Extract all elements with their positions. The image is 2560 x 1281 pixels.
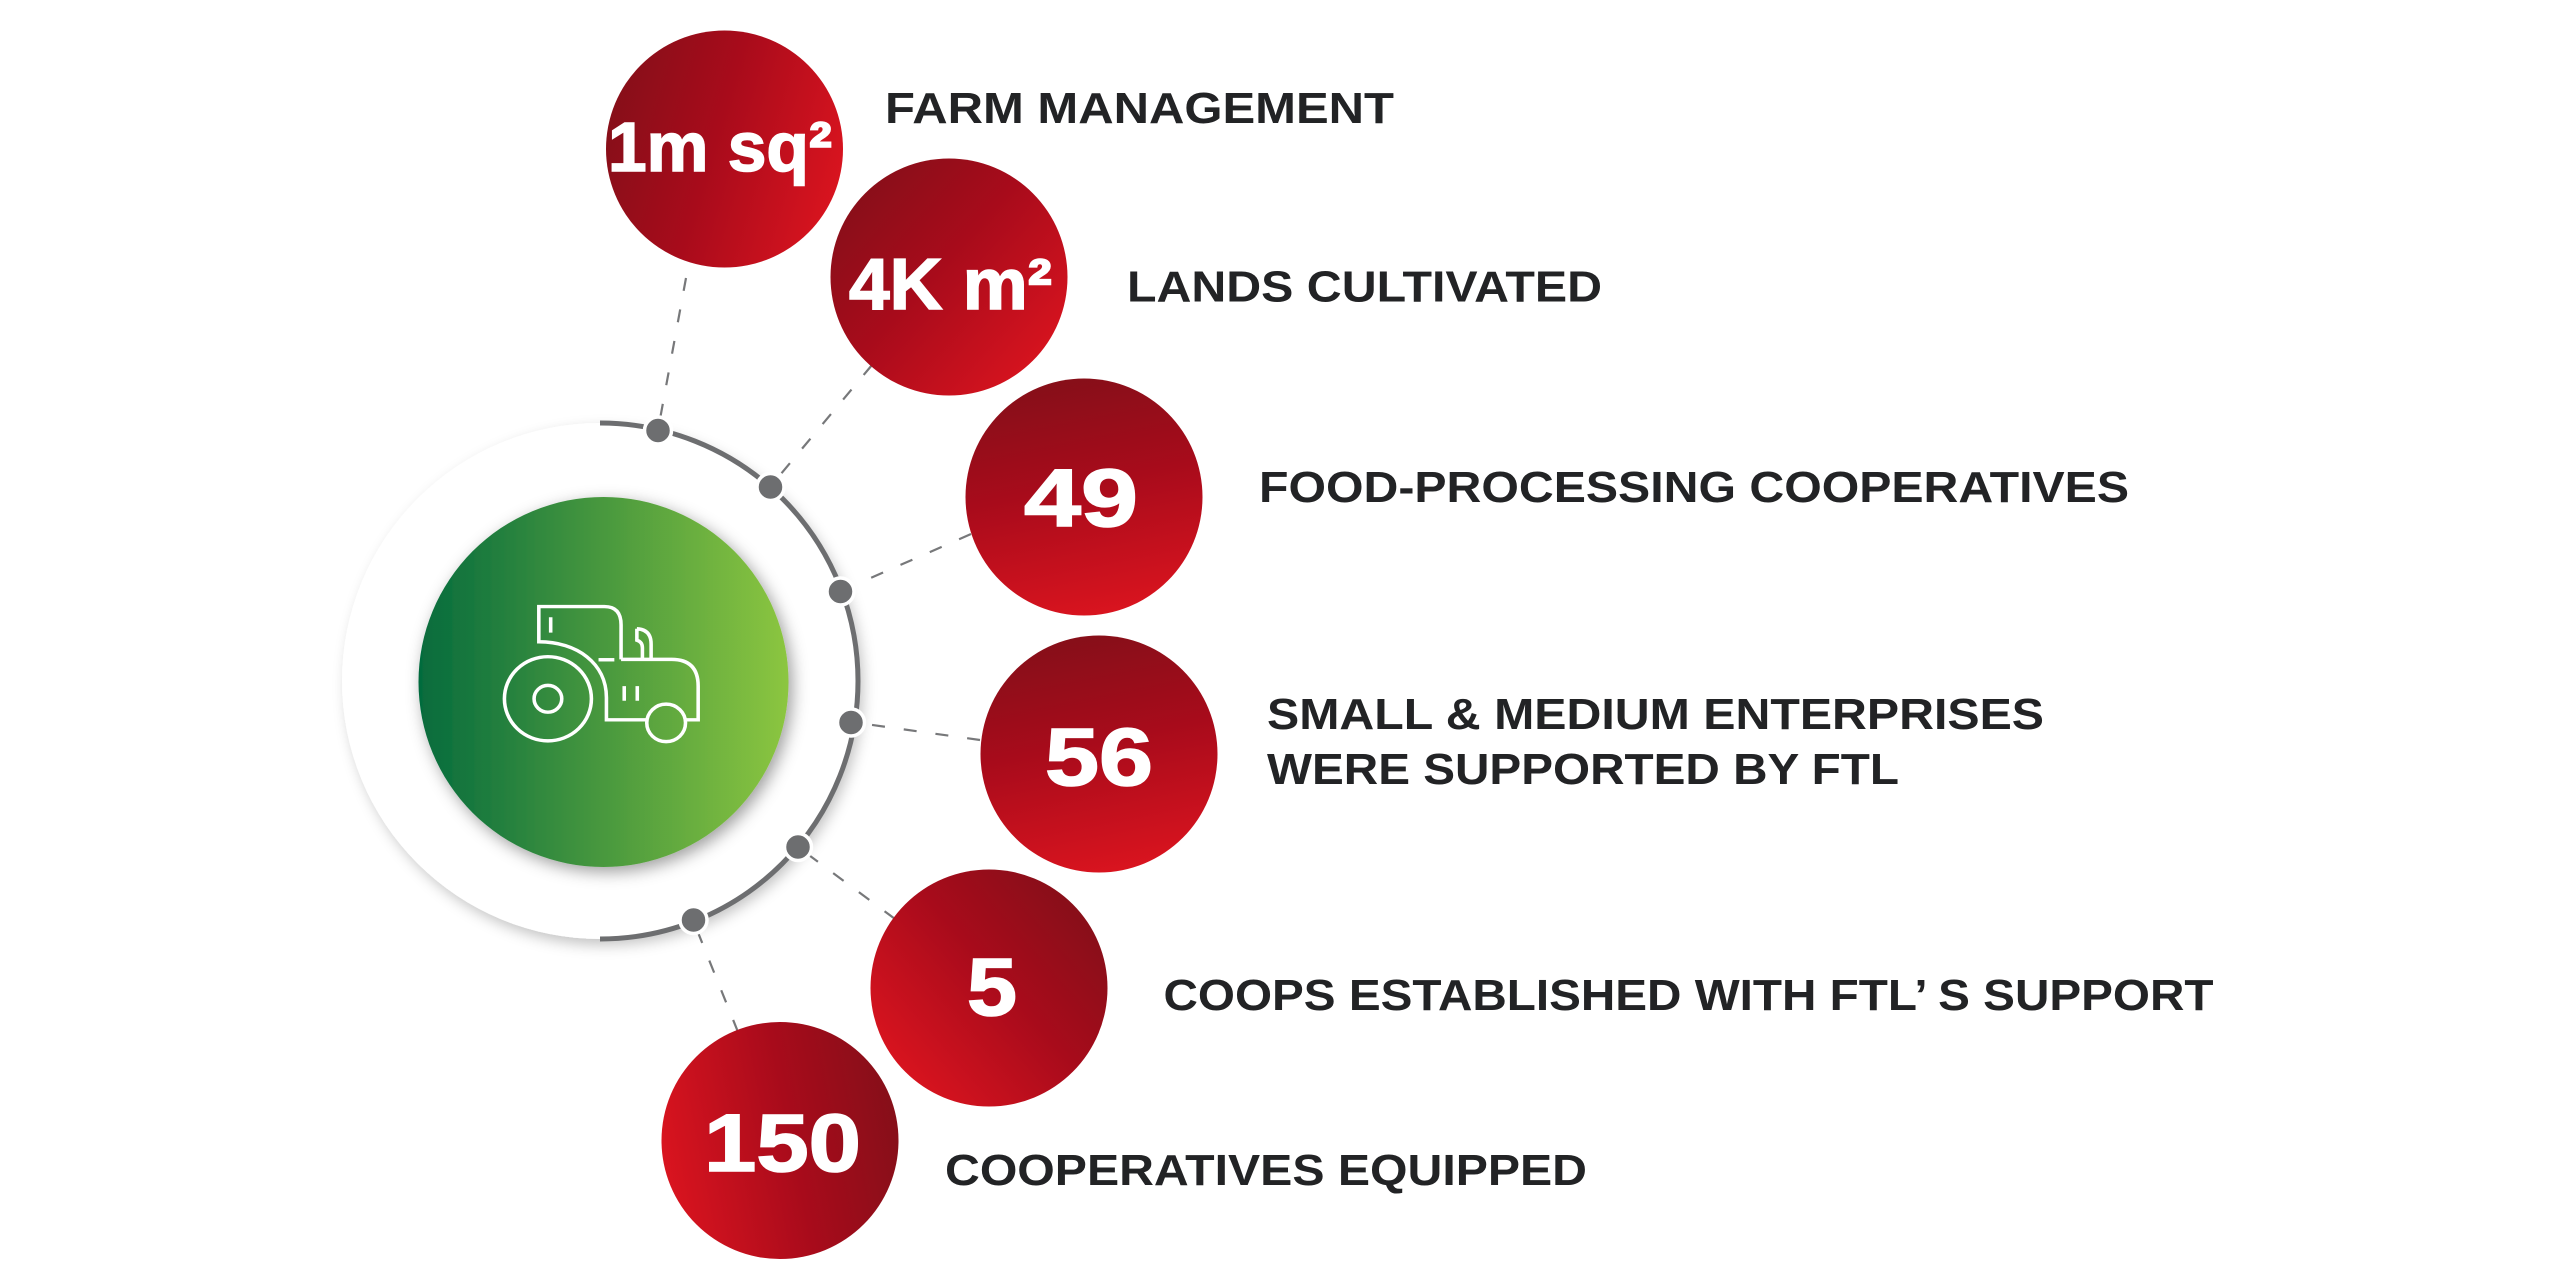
connector dots [644,417,864,934]
stat: coops established [870,870,2214,1106]
label: FOOD-PROCESSING COOPERATIVES [1259,463,2129,512]
stat: cooperatives equipped [662,1022,1587,1259]
red circle 4 [980,636,1218,872]
label: COOPS ESTABLISHED WITH FTL’ S SUPPORT [1164,971,2214,1020]
stat: food-processing cooperatives [966,378,2129,616]
number 56: 56 [1045,712,1153,803]
number 5: 5 [967,942,1017,1033]
stat: farm management [606,30,1394,268]
red circle 3 [966,378,1202,616]
label line 1: SMALL & MEDIUM ENTERPRISES [1267,690,2044,739]
red circle 2 [830,158,1068,396]
number 1m sq²: 1m sq² [608,108,832,186]
label: FARM MANAGEMENT [885,84,1394,133]
white outer ring [342,423,858,939]
red circle 1 [606,30,843,268]
number 49: 49 [1024,453,1138,544]
icon: tractor [504,607,698,742]
number 150: 150 [704,1098,861,1189]
central hub [342,423,858,939]
green circle [418,497,788,867]
label: COOPERATIVES EQUIPPED [945,1146,1587,1195]
grey arc [600,423,858,939]
label: LANDS CULTIVATED [1127,262,1602,312]
stat: lands cultivated [830,158,1602,396]
stat: small and medium enterprises [980,636,2044,872]
red circle 6 [662,1022,898,1259]
label line 2: WERE SUPPORTED BY FTL [1267,745,1899,794]
dashed connectors [658,278,980,1032]
red circle 5 [870,870,1108,1106]
number 4K m²: 4K m² [849,245,1052,325]
